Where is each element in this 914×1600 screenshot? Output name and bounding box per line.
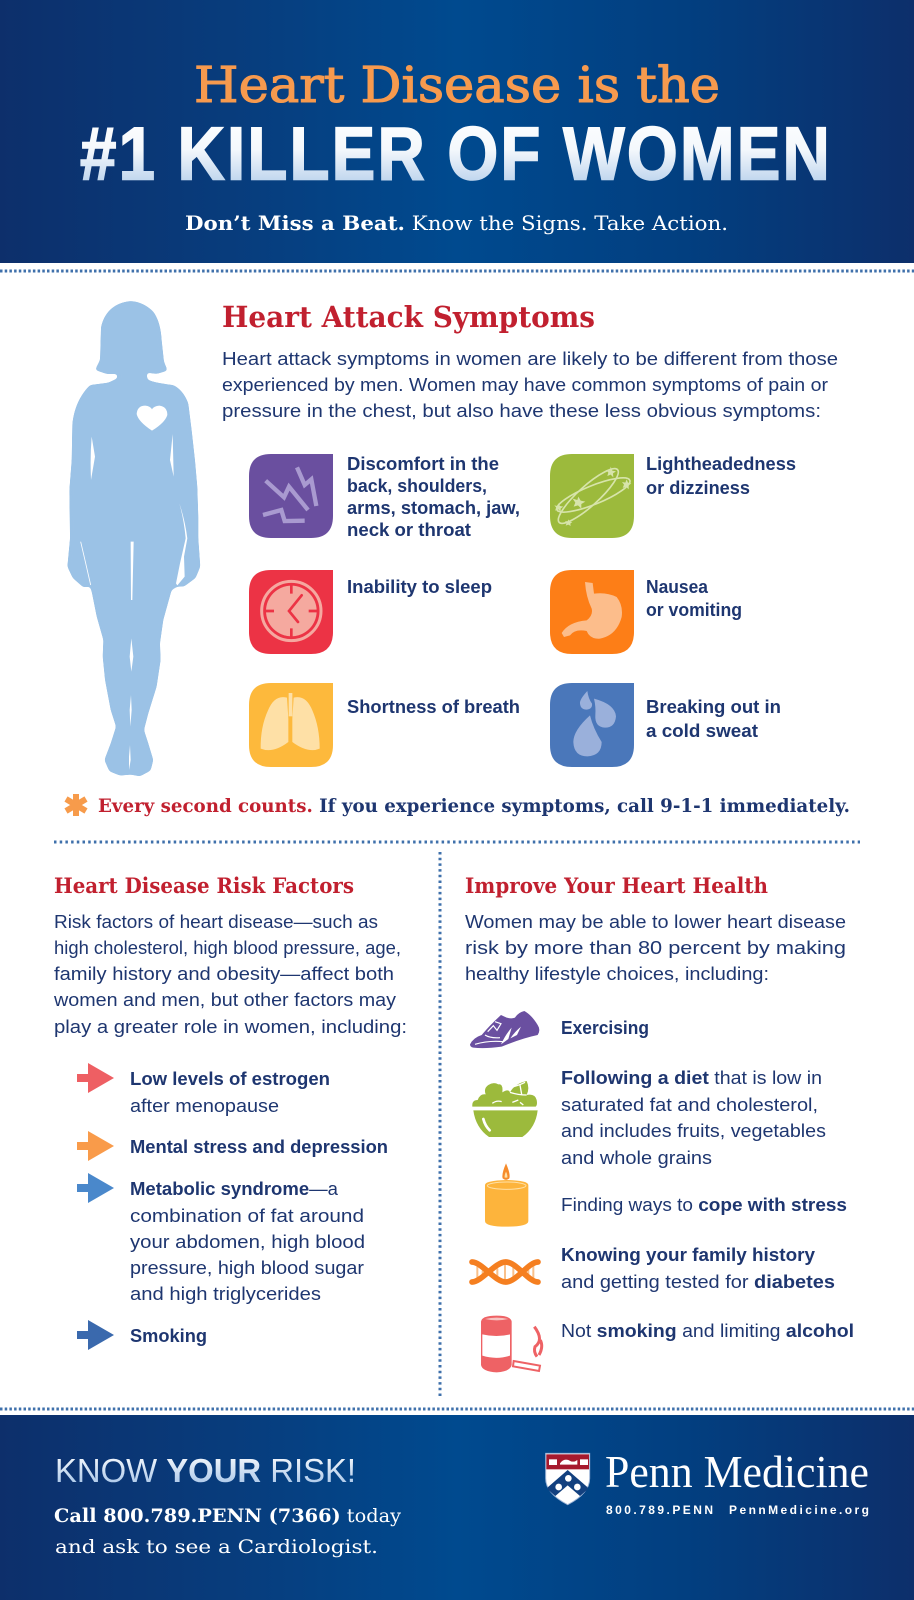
label: Nausea xyxy=(646,577,709,597)
risk: smoking xyxy=(77,1320,207,1350)
icon: dna helix xyxy=(472,1262,538,1283)
label: Exercising xyxy=(561,1018,649,1038)
label xyxy=(130,1179,365,1304)
intro paragraph: Heart attack symptoms in women are likely to be different from those xyxy=(222,349,838,369)
icon: candle xyxy=(485,1163,528,1227)
label: neck or throat xyxy=(347,520,471,540)
label: Lightheadedness xyxy=(646,454,796,474)
label xyxy=(561,1068,826,1168)
heading: risk factors: Heart Disease Risk Factors xyxy=(54,873,354,898)
label: and includes fruits, vegetables xyxy=(561,1121,826,1141)
label: back, shoulders, xyxy=(347,476,487,496)
improve paragraph xyxy=(465,912,846,984)
label: Following a diet that is low in xyxy=(561,1068,822,1088)
risk factors paragraph xyxy=(53,912,407,1037)
risk factors paragraph: family history and obesity—affect both xyxy=(54,964,394,984)
label: and high triglycerides xyxy=(130,1284,321,1304)
label: Finding ways to cope with stress xyxy=(561,1195,847,1215)
label: arms, stomach, jaw, xyxy=(347,498,520,518)
logo wordmark: Penn Medicine xyxy=(605,1446,869,1497)
improve paragraph: risk by more than 80 percent by making xyxy=(465,938,846,958)
risk factors paragraph: play a greater role in women, including: xyxy=(54,1017,407,1037)
footer heading: KNOW YOUR RISK! xyxy=(55,1452,356,1489)
label: Mental stress and depression xyxy=(130,1137,388,1157)
icon: asterisk xyxy=(66,794,86,816)
label xyxy=(646,697,781,741)
callout: every second counts xyxy=(66,794,850,817)
logo: Penn Medicine xyxy=(546,1446,869,1517)
icon: female body silhouette with heart xyxy=(67,301,200,776)
label: or vomiting xyxy=(646,600,742,620)
callout text: Every second counts. If you experience symptoms, call 9-1-1 immediately. xyxy=(98,796,850,817)
label xyxy=(347,454,520,540)
item: exercising xyxy=(470,1011,649,1048)
symptom: lightheadedness xyxy=(550,454,796,538)
label: after menopause xyxy=(130,1096,279,1116)
icon: clock xyxy=(249,570,333,654)
footer call to action: and ask to see a Cardiologist. xyxy=(55,1536,378,1558)
intro paragraph xyxy=(222,349,838,421)
label: combination of fat around xyxy=(130,1206,364,1226)
label: Inability to sleep xyxy=(347,577,492,597)
item: stress xyxy=(485,1163,847,1227)
heading: improve: Improve Your Heart Health xyxy=(465,873,768,898)
label: Shortness of breath xyxy=(347,697,520,717)
label xyxy=(561,1245,835,1292)
item: diet xyxy=(472,1068,826,1168)
icon: shoe xyxy=(470,1011,539,1048)
panel: improve your heart health xyxy=(465,873,854,1372)
icon: salad bowl xyxy=(472,1081,538,1137)
risk: metabolic syndrome xyxy=(77,1173,365,1304)
risk: low estrogen xyxy=(77,1063,330,1116)
intro paragraph: experienced by men. Women may have common symptoms of pain or xyxy=(222,375,828,395)
arrow: red xyxy=(77,1063,114,1093)
label: or dizziness xyxy=(646,478,750,498)
icon: sweat drops xyxy=(550,683,634,767)
label: and whole grains xyxy=(561,1148,712,1168)
label: Metabolic syndrome —a xyxy=(130,1179,339,1199)
symptom: cold sweat xyxy=(550,683,781,767)
symptom: nausea xyxy=(550,570,742,654)
footer call to action xyxy=(54,1505,401,1558)
panel: risk factors xyxy=(53,873,407,1350)
item: family history xyxy=(472,1245,835,1292)
icon: heart xyxy=(137,406,167,431)
label: saturated fat and cholesterol, xyxy=(561,1095,818,1115)
logo contact line xyxy=(606,1503,869,1517)
logo contact line: 800.789.PENN xyxy=(606,1503,713,1517)
label: Discomfort in the xyxy=(347,454,499,474)
item: smoking and alcohol xyxy=(481,1316,854,1372)
icon: lightning bolts xyxy=(249,454,333,538)
risk: mental stress xyxy=(77,1131,388,1161)
panel: header banner xyxy=(0,0,914,263)
improve paragraph: healthy lifestyle choices, including: xyxy=(465,964,769,984)
label: Smoking xyxy=(130,1326,207,1346)
label: Knowing your family history xyxy=(561,1245,815,1265)
risk factors paragraph: high cholesterol, high blood pressure, age, xyxy=(54,938,401,958)
icon: stomach xyxy=(550,570,634,654)
label: and getting tested for diabetes xyxy=(561,1272,835,1292)
risk factors paragraph: Risk factors of heart disease—such as xyxy=(54,912,378,932)
heading: heart attack symptoms: Heart Attack Symptoms xyxy=(222,300,595,334)
label: your abdomen, high blood xyxy=(130,1232,365,1252)
arrow: light blue xyxy=(77,1173,114,1203)
label xyxy=(646,454,796,498)
label: Low levels of estrogen xyxy=(130,1069,330,1089)
panel: footer banner xyxy=(0,1415,914,1600)
symptom: shortness of breath xyxy=(249,683,520,767)
improve paragraph: Women may be able to lower heart disease xyxy=(465,912,846,932)
label xyxy=(130,1069,330,1116)
label: Breaking out in xyxy=(646,697,781,717)
label xyxy=(646,577,742,620)
title line 1: Heart Disease is the xyxy=(194,56,720,114)
panel: heart attack symptoms xyxy=(222,300,838,767)
logo contact line: PennMedicine.org xyxy=(729,1503,869,1517)
label: pressure, high blood sugar xyxy=(130,1258,364,1278)
arrow: dark blue xyxy=(77,1320,114,1350)
icon: lungs xyxy=(249,683,333,767)
intro paragraph: pressure in the chest, but also have these less obvious symptoms: xyxy=(222,401,821,421)
risk factors paragraph: women and men, but other factors may xyxy=(53,990,396,1010)
label: a cold sweat xyxy=(646,721,758,741)
footer call to action: Call 800.789.PENN (7366) today xyxy=(54,1505,401,1527)
icon: shield xyxy=(546,1453,590,1505)
icon: stars orbit xyxy=(550,454,634,538)
tagline: Don’t Miss a Beat. Know the Signs. Take Action. xyxy=(185,211,728,235)
symptom: discomfort xyxy=(249,454,520,540)
arrow: orange xyxy=(77,1131,114,1161)
symptom: inability to sleep xyxy=(249,570,492,654)
label: Not smoking and limiting alcohol xyxy=(561,1321,854,1341)
icon: can and cigarette xyxy=(481,1316,542,1372)
